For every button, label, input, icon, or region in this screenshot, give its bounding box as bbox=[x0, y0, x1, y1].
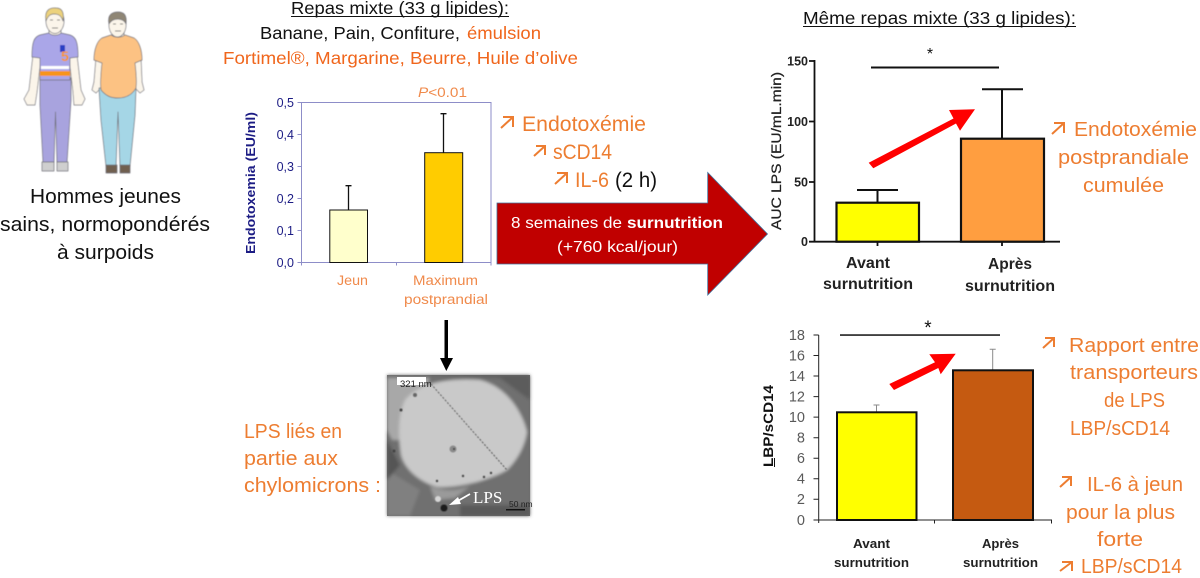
y axis tick labels bbox=[787, 54, 808, 249]
y axis tick labels: 4 bbox=[797, 472, 805, 488]
arrow: 8 weeks of overfeeding: (+760 kcal/jour) bbox=[557, 239, 678, 256]
axes bbox=[809, 60, 1060, 246]
micrograph: chylomicron with LPS: 50 nm bbox=[509, 499, 533, 509]
x axis labels: Jeun bbox=[337, 273, 368, 288]
significance bracket bbox=[871, 46, 999, 68]
significance bracket: * bbox=[927, 46, 933, 63]
caption: subjects bbox=[0, 185, 210, 264]
text: meal composition: émulsion bbox=[467, 23, 541, 43]
scale label bbox=[397, 377, 426, 385]
figure: lean man bbox=[24, 8, 85, 171]
y axis tick labels: 0 bbox=[801, 235, 808, 249]
scale bar bbox=[506, 509, 525, 510]
caption: subjects: Hommes jeunes bbox=[30, 185, 181, 208]
bar: postprandial maximum bbox=[425, 114, 463, 262]
y axis tick labels bbox=[277, 96, 294, 270]
y axis tick labels: 6 bbox=[797, 451, 805, 467]
y axis tick labels: 0,3 bbox=[277, 160, 294, 174]
red trend arrow bbox=[869, 109, 975, 168]
y axis title: LBP/sCD14 bbox=[761, 384, 776, 467]
y axis tick labels bbox=[789, 328, 805, 529]
y axis tick labels: 10 bbox=[789, 410, 805, 426]
y axis tick labels: 150 bbox=[787, 54, 808, 68]
micrograph: chylomicron with LPS bbox=[387, 375, 533, 516]
text: LPS transporter ratio: de LPS bbox=[1104, 389, 1165, 412]
icon: up arrow bbox=[1060, 562, 1072, 571]
text: cumulative endotoxemia: cumulée bbox=[1083, 174, 1164, 197]
arrow: 8 weeks of overfeeding: 8 semaines de bbox=[511, 215, 622, 232]
x axis labels: Après bbox=[982, 536, 1019, 551]
icon: up arrow bbox=[1052, 123, 1064, 134]
text: LPS bound to chylomicrons: LPS liés en bbox=[244, 420, 342, 443]
x axis labels: Avant bbox=[853, 536, 891, 551]
text: postprandial increases: Endotoxémie bbox=[522, 113, 646, 136]
x axis labels: Après bbox=[988, 256, 1032, 273]
text: fasting IL-6: forte bbox=[1097, 528, 1143, 551]
text: fasting IL-6 bbox=[1060, 473, 1183, 578]
bar chart: endotoxemia bbox=[244, 85, 491, 307]
text: LPS bound to chylomicrons: chylomicrons : bbox=[244, 474, 381, 497]
white band on shirt bbox=[41, 66, 69, 69]
arrow: down to micrograph bbox=[440, 320, 453, 371]
text: cumulative endotoxemia bbox=[1052, 118, 1197, 197]
face details: overweight man bbox=[113, 24, 123, 31]
x axis labels: Maximum bbox=[413, 273, 478, 288]
bar: before bbox=[836, 190, 919, 242]
text: LPS bound to chylomicrons: partie aux bbox=[244, 447, 339, 470]
text: postprandial increases bbox=[501, 113, 657, 192]
bar: before bbox=[837, 405, 916, 520]
shirt logo bbox=[60, 45, 65, 52]
text: fasting IL-6: IL-6 à jeun bbox=[1087, 473, 1183, 496]
y axis tick labels: 0,0 bbox=[277, 256, 294, 270]
y axis tick labels: 8 bbox=[797, 430, 805, 446]
arrow: 8 weeks of overfeeding bbox=[497, 172, 768, 295]
text: postprandial increases: sCD14 bbox=[553, 141, 612, 164]
arrow: 8 weeks of overfeeding: surnutrition bbox=[627, 215, 723, 232]
text: LPS transporter ratio: LBP/sCD14 bbox=[1070, 417, 1170, 440]
y axis tick labels: 0,1 bbox=[277, 224, 294, 238]
micrograph: chylomicron with LPS: 321 nm bbox=[400, 379, 432, 390]
red trend arrow bbox=[889, 354, 956, 390]
caption: subjects: sains, normopondérés bbox=[0, 213, 210, 236]
x axis labels bbox=[337, 273, 488, 307]
y axis tick labels: 100 bbox=[787, 115, 808, 129]
y axis tick labels: 14 bbox=[789, 369, 805, 385]
x axis labels: surnutrition bbox=[823, 276, 913, 293]
significance bracket: * bbox=[924, 318, 932, 339]
text: postprandial increases: (2 h) bbox=[615, 169, 657, 192]
icon: up arrow bbox=[555, 173, 567, 184]
x axis labels: surnutrition bbox=[834, 555, 909, 570]
orange band on shirt bbox=[40, 71, 70, 76]
y axis tick labels: 0,2 bbox=[277, 192, 294, 206]
x axis labels: Avant bbox=[846, 255, 890, 272]
icon: up arrow bbox=[1060, 477, 1071, 487]
text: meal composition: Banane, Pain, Confiture, bbox=[260, 23, 460, 43]
text: postprandial increases: IL-6 bbox=[575, 169, 609, 192]
axes bbox=[814, 335, 1052, 524]
illustration: two young men bbox=[24, 8, 144, 173]
text: cumulative endotoxemia: Endotoxémie bbox=[1074, 118, 1197, 141]
y axis title: Endotoxemia (EU/ml) bbox=[244, 112, 258, 254]
text: LPS transporter ratio bbox=[1043, 334, 1199, 440]
LPS pointer bbox=[456, 494, 470, 502]
x axis labels: surnutrition bbox=[965, 278, 1055, 295]
x axis labels: postprandial bbox=[404, 292, 488, 307]
x axis labels bbox=[823, 255, 1055, 295]
x axis labels: surnutrition bbox=[963, 555, 1038, 570]
icon: up arrow bbox=[534, 146, 545, 156]
micrograph: chylomicron with LPS: LPS bbox=[473, 488, 502, 507]
caption: subjects: à surpoids bbox=[57, 241, 154, 264]
text: LPS bound to chylomicrons bbox=[244, 420, 381, 497]
bar: after bbox=[953, 349, 1033, 520]
y axis tick labels: 16 bbox=[789, 348, 805, 364]
bar: after bbox=[961, 89, 1044, 242]
heading: same mixed meal: Même repas mixte (33 g lipides): bbox=[803, 8, 1076, 28]
y axis tick labels: 18 bbox=[789, 328, 805, 344]
text: meal composition bbox=[223, 23, 578, 68]
text: LPS transporter ratio: transporteurs bbox=[1070, 361, 1198, 384]
y axis tick labels: 0,5 bbox=[277, 96, 294, 110]
icon: up arrow bbox=[501, 117, 513, 128]
p value: P<0.01 bbox=[418, 85, 467, 100]
bar: fasting bbox=[330, 186, 368, 262]
illustration: two young men: 5 bbox=[61, 48, 69, 64]
icon: up arrow bbox=[1043, 338, 1054, 348]
y axis tick labels: 0,4 bbox=[277, 128, 294, 142]
bar chart: LBP/sCD14 bbox=[761, 318, 1052, 570]
y axis title: AUC LPS (EU/mL.min) bbox=[768, 72, 784, 230]
y axis tick labels: 0 bbox=[797, 513, 805, 529]
y axis tick labels: 2 bbox=[797, 492, 805, 508]
text: LPS transporter ratio: Rapport entre bbox=[1069, 334, 1199, 357]
figure: overweight man bbox=[92, 12, 144, 173]
text: fasting IL-6: LBP/sCD14 bbox=[1081, 555, 1182, 578]
text: fasting IL-6: pour la plus bbox=[1066, 501, 1175, 524]
text: cumulative endotoxemia: postprandiale bbox=[1058, 146, 1189, 169]
face details: lean man bbox=[50, 20, 60, 28]
y axis tick labels: 50 bbox=[794, 176, 808, 190]
axis title underline mark bbox=[774, 458, 775, 467]
x axis labels bbox=[834, 536, 1038, 570]
bar chart: AUC LPS bbox=[768, 46, 1060, 295]
y axis tick labels: 12 bbox=[789, 390, 805, 406]
text: meal composition: Fortimel®, Margarine, Beurre, Huile d’olive bbox=[223, 48, 578, 68]
plot frame bbox=[302, 102, 491, 262]
